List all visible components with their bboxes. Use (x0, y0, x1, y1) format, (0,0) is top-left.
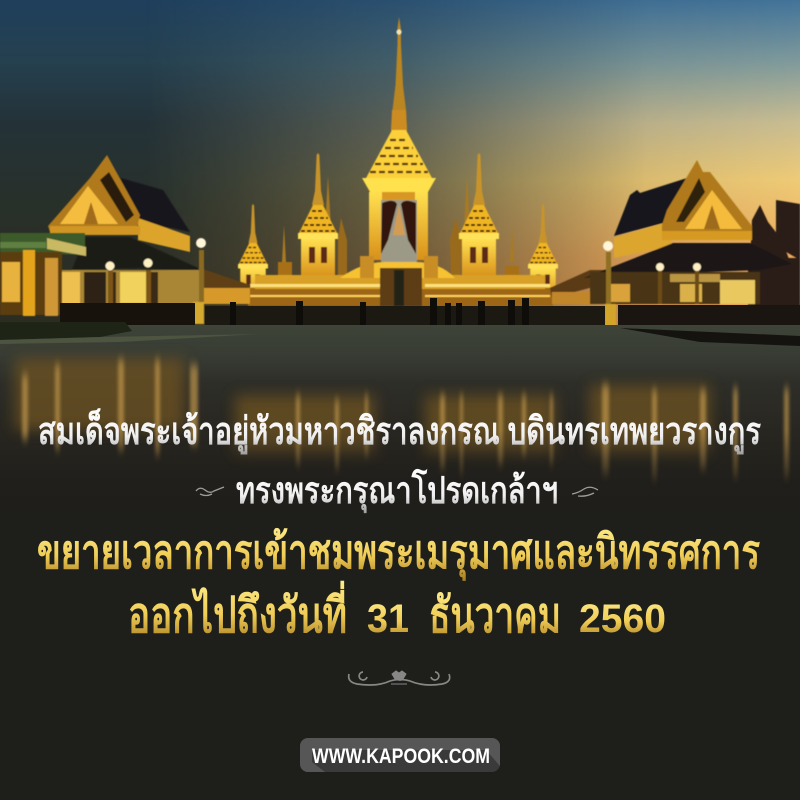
photo: dusk sky (0, 0, 800, 340)
lamps (106, 238, 206, 324)
tower: left prang (298, 153, 338, 277)
lower interior glow (60, 270, 200, 304)
badge: website url (300, 738, 500, 772)
badge: website url: WWW.KAPOOK.COM (312, 745, 490, 768)
plaza ground and wet floor base (0, 322, 800, 520)
left pavilion (0, 155, 250, 324)
upper wall (614, 222, 672, 258)
outer gable frame (48, 155, 140, 232)
base platform (248, 262, 553, 306)
headline line 4: gold date (128, 580, 666, 643)
gable beam (50, 226, 140, 235)
ornament: bottom flourish (349, 671, 450, 685)
ornament: left swirl (196, 487, 224, 496)
tower: small left spire (238, 204, 268, 297)
long side roof (550, 270, 612, 298)
tower: small right spire (528, 204, 558, 297)
central spire (362, 17, 436, 262)
long side roof (200, 268, 250, 296)
far right dark roofs (748, 200, 800, 308)
central tiered roof (366, 130, 432, 178)
slim spires behind towers (278, 176, 519, 292)
headline line 4: gold date: 2560 (579, 597, 666, 641)
upper wall (138, 218, 190, 252)
hedges and fence silhouette (60, 298, 800, 335)
bright gable face (60, 186, 118, 224)
headline line 4: gold date: ออกไปถึงวันที่ (128, 580, 347, 643)
gable beam (662, 231, 752, 240)
side hall with columns (0, 250, 62, 316)
headline line 4: gold date: 31 (367, 597, 409, 641)
dark main roof (614, 178, 687, 236)
headline line 4: gold date: ธันวาคม (429, 589, 561, 643)
central pavilion body (362, 178, 436, 262)
lower interior glow (590, 272, 760, 304)
lamps (603, 241, 701, 326)
right pavilion (550, 160, 800, 326)
tower: right prang (459, 153, 499, 277)
lower roof (72, 237, 198, 272)
central stairs (360, 256, 438, 306)
dark main roof (117, 177, 190, 232)
lower roof (584, 243, 792, 278)
heading line 2: white subtitle: ทรงพระกรุณาโปรดเกล้าฯ (236, 468, 558, 514)
outer gable frame (662, 160, 752, 240)
ornament: right swirl (572, 487, 598, 496)
reflection on the wet floor (15, 358, 789, 480)
bright gable face (685, 190, 742, 229)
green side roof (0, 233, 85, 255)
temple: royal crematorium complex (238, 17, 558, 306)
